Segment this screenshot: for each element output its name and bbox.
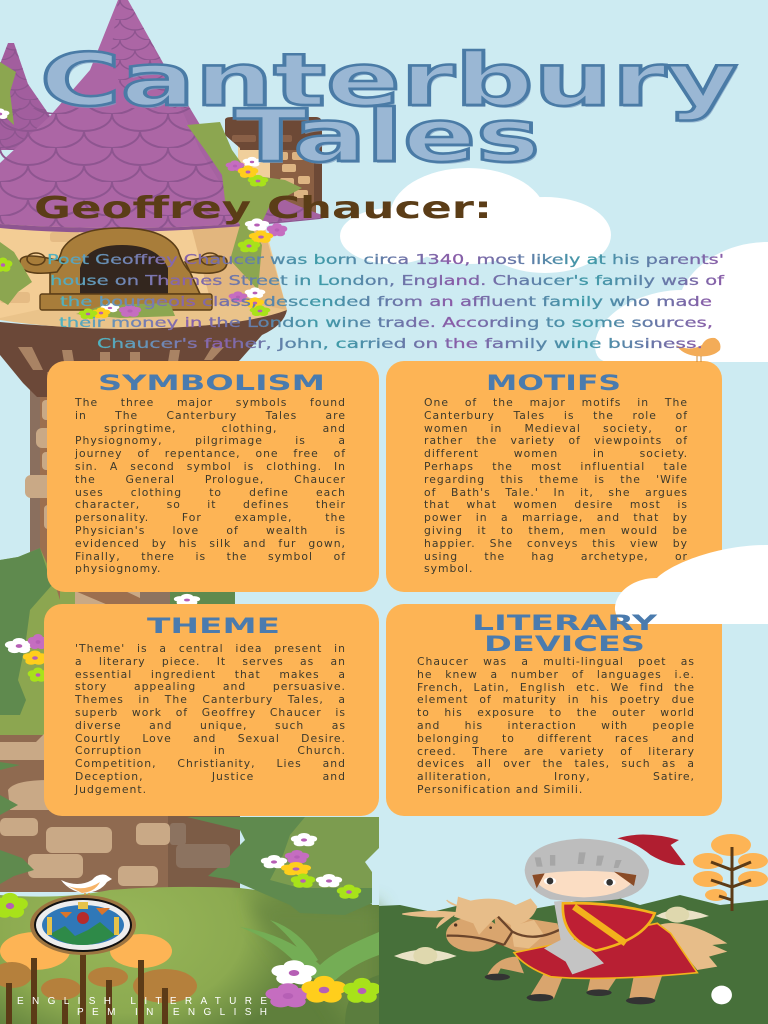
text: symbolism: the General Prologue, Chaucer [75, 473, 346, 486]
pebble [711, 986, 732, 1004]
text: motifs: Perhaps the most influential tale [424, 460, 688, 473]
intro paragraph: house on Thames Street in London, England. Chaucer's family was of [50, 273, 726, 289]
footer label: ENGLISH LITERATURE [17, 996, 267, 1007]
panel headings: MOTIFS [486, 371, 621, 395]
panel: symbolism background [47, 361, 379, 592]
text: theme: superb work of Geoffrey Chaucer is [75, 706, 346, 719]
wall [0, 815, 240, 892]
balcony [0, 310, 287, 397]
text: motifs: symbol. [424, 562, 473, 575]
title [40, 38, 740, 180]
left ivy [0, 548, 60, 740]
horse tail [659, 923, 727, 970]
text: symbolism: evidenced by his silk and fur gown, [75, 537, 346, 550]
text: motifs: women in Medieval society, or [424, 422, 688, 435]
intro paragraph: the bourgeois class, descended from an affluent family who made [60, 294, 712, 310]
intro paragraph: their money in the London wine trade. According to some sources, [59, 315, 713, 331]
text: literary devices: Personification and Simili. [417, 783, 583, 796]
bird: right [676, 338, 720, 362]
cloud: lower right [615, 545, 768, 624]
panel headings: SYMBOLISM [98, 371, 325, 395]
ivy flowers [0, 108, 287, 319]
text: symbolism: The three major symbols found [75, 396, 346, 409]
text: theme [74, 642, 346, 796]
white flowers [394, 907, 709, 964]
text: theme: Corruption in Church. [75, 744, 346, 757]
text: motifs [424, 396, 688, 575]
text: symbolism: Physiognomy, pilgrimage is a [75, 434, 346, 447]
cloud: right [595, 242, 768, 362]
text: theme: diverse and unique, such as [75, 719, 346, 732]
main roof [0, 0, 328, 232]
ground: left hillside [0, 548, 381, 1024]
text: symbolism: journey of repentance, one free of [75, 447, 346, 460]
text: literary devices: and his interaction with people [417, 719, 695, 732]
text: motifs: One of the major motifs in The [424, 396, 688, 409]
panel headings: LITERARY [472, 611, 658, 635]
panel: motifs background [386, 361, 722, 592]
orange trees [0, 932, 197, 1024]
text: theme: Competition, Christianity, Lies and [75, 757, 346, 770]
grass leaves [240, 920, 379, 985]
panel: theme background [44, 604, 379, 816]
text: literary devices: he knew a number of languages i.e. [417, 668, 695, 681]
ivy [0, 62, 302, 318]
panel headings: THEME [147, 614, 280, 638]
text: motifs: that what women desire most is [424, 498, 688, 511]
ivy lower [187, 817, 379, 915]
face [532, 871, 636, 897]
text: motifs: rather the variety of viewpoints of [424, 434, 688, 447]
text: motifs: happier. She conveys this view by [424, 537, 688, 550]
text: symbolism: physiognomy. [75, 562, 161, 575]
text: literary devices: Chaucer was a multi-lingual poet as [417, 655, 695, 668]
window [20, 228, 227, 310]
text: theme: essential ingredient that makes a [75, 668, 346, 681]
text: motifs: power in a marriage, and that by [424, 511, 688, 524]
strip between panels [60, 591, 75, 605]
text: theme: story appealing and persuasive. [75, 680, 346, 693]
text: motifs: different women in society. [424, 447, 688, 460]
legs [487, 957, 662, 1000]
text: literary devices: element of maturity in his poetry due [417, 693, 695, 706]
text: literary devices: to his exposure to the outer world [417, 706, 695, 719]
text: symbolism: in The Canterbury Tales are [75, 409, 346, 422]
bridle [447, 917, 562, 945]
text: motifs: regarding this theme is the 'Wife [424, 473, 688, 486]
illustration: tree [693, 834, 768, 911]
hillside flowers [0, 634, 381, 1007]
title: Tales [234, 94, 540, 178]
text: symbolism: sin. A second symbol is clothing. In [75, 460, 346, 473]
text: literary devices: alliteration, Irony, Satire, [417, 770, 695, 783]
text: symbolism: character, so it defines their [75, 498, 346, 511]
text: theme: Deception, Justice and [75, 770, 346, 783]
chimney tower [225, 117, 322, 215]
armoured leg [544, 900, 604, 974]
text: symbolism: springtime, clothing, and [104, 422, 346, 435]
text: motifs: giving it to them, men would be [424, 524, 688, 537]
text: literary devices [417, 655, 695, 796]
text: literary devices: creed. There are variety of literary [417, 745, 695, 758]
text: theme: Themes in The Canterbury Tales, a [75, 693, 346, 706]
illustration: knight on horse [394, 835, 732, 1004]
title: Canterbury [40, 38, 738, 122]
wall stones [0, 818, 170, 886]
text: motifs: of Bath's Tale.' In it, she argues [424, 486, 688, 499]
text: theme: Judgement. [75, 783, 147, 796]
intro paragraph [47, 252, 726, 352]
hill [0, 887, 379, 1024]
title: Canterbury [42, 40, 740, 124]
university seal [30, 895, 136, 955]
text: symbolism: personality. For example, the [75, 511, 346, 524]
caparison [514, 923, 697, 978]
panel headings [98, 371, 658, 656]
plume [617, 835, 686, 865]
text: theme: 'Theme' is a central idea present in [75, 642, 346, 655]
text: symbolism [74, 396, 346, 575]
trunk [30, 350, 235, 600]
helmet [525, 839, 649, 901]
illustration: castle tower [0, 0, 328, 600]
text: symbolism: Physician's love of wealth is [75, 524, 346, 537]
text: symbolism: Finally, there is the symbol of [75, 550, 346, 563]
footer label: PEM IN ENGLISH [77, 1007, 267, 1018]
subheading: Geoffrey Chaucer: Geoffrey Chaucer: [34, 191, 492, 226]
left turret [0, 43, 50, 150]
text: literary devices: belonging to different races and [417, 732, 695, 745]
text: motifs: Canterbury Tales is the role of [424, 409, 688, 422]
text: motifs: using the hag archetype, or [424, 550, 688, 563]
ground: right hedge [379, 895, 768, 1024]
text: theme: a literary piece. It serves as an [75, 655, 346, 668]
stone base [0, 735, 60, 890]
intro paragraph: Poet Geoffrey Chaucer was born circa 1340, most likely at his parents' [47, 252, 724, 268]
tower wall [0, 215, 287, 320]
title: Tales [236, 96, 542, 180]
text: literary devices: French, Latin, English etc. We find the [417, 681, 695, 694]
mane and ears [454, 897, 544, 948]
horse neck and head [494, 913, 566, 952]
cloud: top centre [340, 168, 611, 273]
panel: literary devices background [386, 604, 722, 816]
shield [563, 903, 655, 951]
text: symbolism: uses clothing to define each [75, 486, 346, 499]
text: theme: Courtly Love and Sexual Desire. [75, 732, 346, 745]
intro paragraph: Chaucer's father, John, carried on the family wine business. [97, 336, 703, 352]
footer label [17, 996, 267, 1018]
bird: left [61, 875, 112, 899]
text: literary devices: devices all over the tales, such as a [417, 757, 695, 770]
panel headings: DEVICES [484, 632, 645, 656]
